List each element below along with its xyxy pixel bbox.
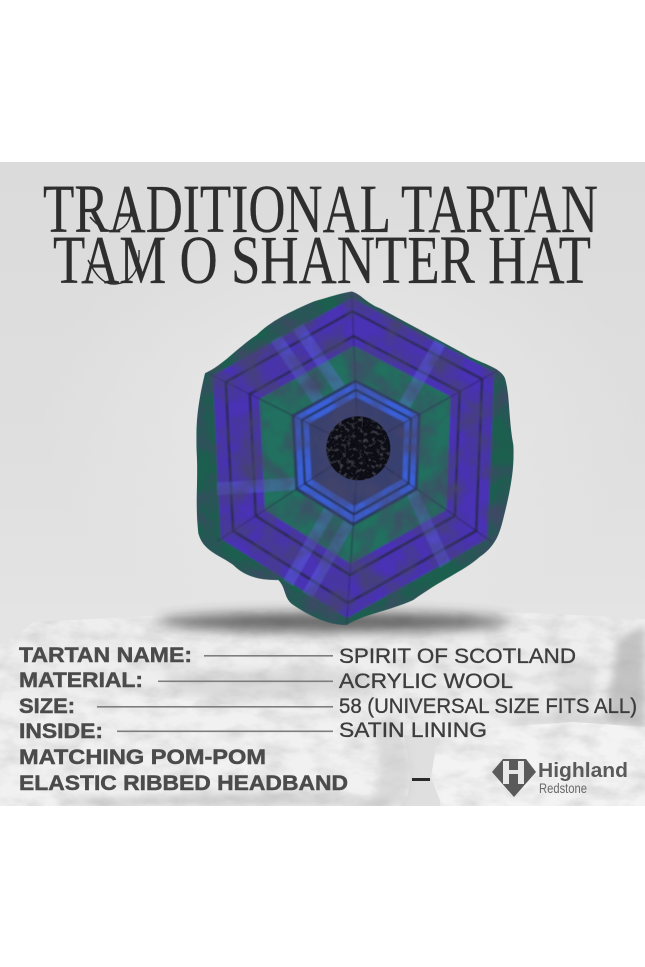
- size row: SIZE:: [19, 694, 75, 718]
- cross stripes per panel: [206, 318, 454, 605]
- rock shaded crevices: [165, 625, 645, 726]
- logo wordmark: Highland: [538, 760, 628, 782]
- grey studio backdrop: [0, 162, 645, 806]
- tartan name row: [19, 643, 576, 668]
- logo sub-wordmark: Redstone: [539, 780, 587, 796]
- front left rock: [395, 736, 410, 806]
- material row: ACRYLIC WOOL: [339, 669, 513, 693]
- inside row: INSIDE:: [19, 719, 103, 743]
- title swash line 1: [90, 208, 131, 231]
- size row: 58 (UNIVERSAL SIZE FITS ALL): [339, 694, 637, 718]
- front left rock lower shading: [60, 792, 390, 806]
- elastic headband feature: ELASTIC RIBBED HEADBAND: [19, 771, 348, 795]
- front right rock: [431, 722, 645, 806]
- infographic poster: [0, 162, 645, 806]
- tartan name row: SPIRIT OF SCOTLAND: [339, 644, 576, 668]
- logo diamond icon: [492, 759, 536, 797]
- tartan name row: TARTAN NAME:: [19, 643, 192, 667]
- gap floor between rocks: [404, 736, 440, 806]
- inside row: SATIN LINING: [339, 718, 487, 742]
- hat shadow on rock: [160, 612, 510, 632]
- size row: [19, 694, 637, 718]
- Highland Redstone logo: [492, 759, 628, 797]
- hat fabric panels: [196, 292, 514, 625]
- material row: MATERIAL:: [19, 668, 143, 692]
- title swash line 2: [88, 250, 139, 284]
- material row: [19, 668, 513, 693]
- dark gap line: [412, 778, 430, 781]
- matching pom-pom feature: MATCHING POM-POM: [19, 745, 266, 769]
- tartan tam o shanter hat: [196, 292, 514, 625]
- fabric mottling: [196, 292, 514, 625]
- inside row: [19, 718, 487, 743]
- black pom-pom: [326, 416, 390, 480]
- spec list: [19, 643, 637, 795]
- white rock platform: [0, 610, 645, 806]
- front left rock shaded side: [372, 713, 411, 806]
- title: [43, 171, 598, 298]
- back rock slab: [0, 613, 645, 726]
